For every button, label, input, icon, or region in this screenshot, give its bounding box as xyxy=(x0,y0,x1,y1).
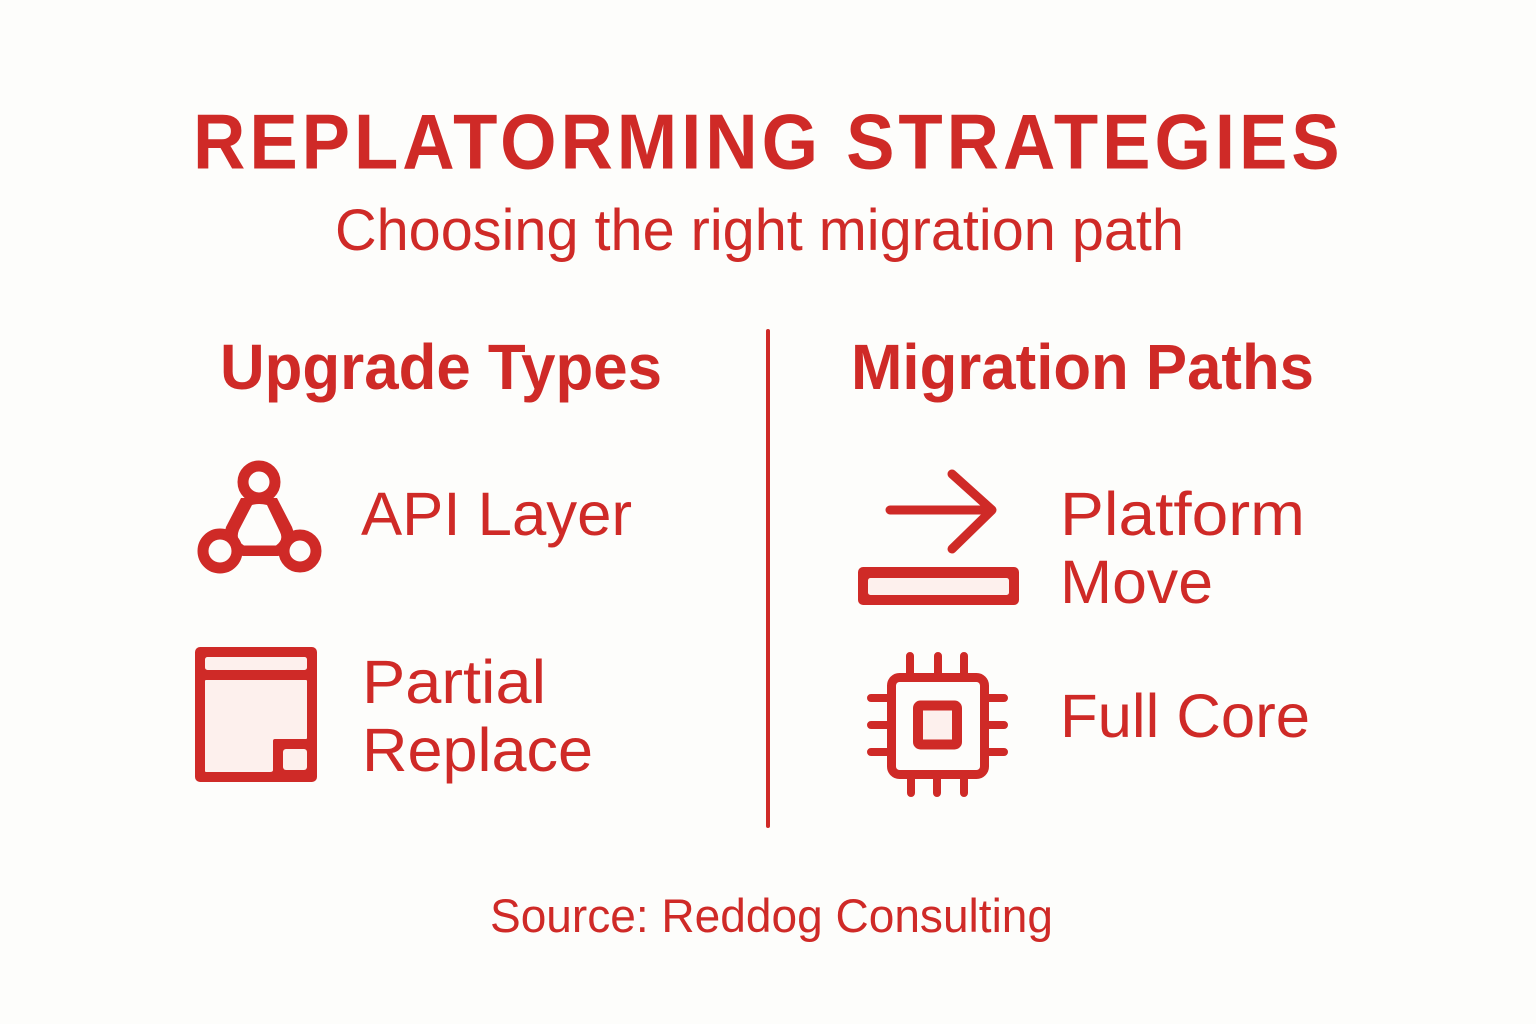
label: full core: Full Core xyxy=(1060,682,1310,750)
source line: Source: Reddog Consulting xyxy=(490,889,1053,942)
icon: api layer network xyxy=(203,466,316,568)
heading: upgrade types: Upgrade Types xyxy=(220,331,662,403)
label: platform move: Move xyxy=(1060,548,1213,616)
label: api layer: API Layer xyxy=(361,480,632,548)
panel: upgrade types xyxy=(195,331,662,784)
label: platform move xyxy=(1060,480,1305,616)
label: platform move: Platform xyxy=(1060,480,1305,548)
heading: migration paths: Migration Paths xyxy=(851,331,1314,403)
icon: platform move arrow and bar xyxy=(858,474,1019,605)
label: partial replace: Replace xyxy=(362,716,593,784)
label: partial replace: Partial xyxy=(362,648,546,716)
label: partial replace xyxy=(362,648,593,784)
panel: migration paths xyxy=(851,331,1314,793)
icon: full core chip xyxy=(871,656,1004,793)
title: REPLATORMING STRATEGIES xyxy=(193,98,1340,185)
center divider xyxy=(766,329,770,828)
subtitle: Choosing the right migration path xyxy=(335,198,1184,263)
icon: partial replace window xyxy=(195,647,317,782)
